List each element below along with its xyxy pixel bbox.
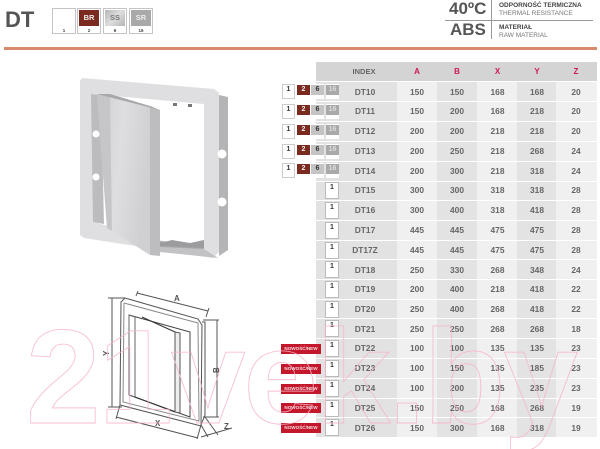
new product badges: NOWOŚĆ/NEW [284,346,318,351]
swatch: white [52,8,76,34]
row DT14: 218 [490,166,504,176]
new product badges: NOWOŚĆ/NEW [284,386,318,390]
thermal label [499,1,582,16]
colour options: single-colour rows: 1 [330,342,334,349]
options DT12: 2 [302,126,305,133]
row DT19 [355,284,581,294]
title: DT [5,7,34,32]
row DT24: 23 [571,383,581,393]
dimension Z: Z [224,422,229,431]
options DT13 [282,144,339,159]
row DT26: 168 [490,422,504,432]
row DT15: 318 [490,185,504,195]
colour options: single-colour rows: 1 [330,303,334,310]
swatch: SS: 6 [114,28,116,33]
row DT12: DT12 [355,126,375,136]
dimension B: B [212,367,221,373]
row DT17Z: DT17Z [352,244,378,254]
swatch: SR: 16 [138,28,144,33]
row DT18: 250 [410,264,424,274]
row DT23: 100 [410,363,424,373]
swatch: SR: SR [136,13,146,22]
row DT23: 135 [490,363,504,373]
row DT13 [355,146,581,156]
row DT16: 300 [410,205,424,215]
row DT11: 218 [530,106,544,116]
table columns background [316,62,597,437]
row DT17: 475 [490,224,504,234]
dimension A: A [174,294,180,303]
new product badges [281,344,321,433]
options DT12 [282,124,339,139]
row DT20: 22 [571,304,581,314]
row DT10: 20 [571,86,581,96]
row DT21: 268 [530,324,544,334]
row DT13: 200 [410,146,424,156]
row DT25: 168 [490,402,504,412]
row DT17: 28 [571,224,581,234]
row DT16: 28 [571,205,581,215]
row DT24: DT24 [355,383,375,393]
table header: Z [574,67,578,76]
options DT11: 6 [316,106,319,113]
row DT21: DT21 [355,324,375,334]
table header: INDEX [353,67,375,76]
options DT11 [282,104,339,119]
dimension X: X [155,419,161,428]
material label: MATERIAŁ [499,24,532,30]
material label: RAW MATERIAL [499,32,548,38]
row DT16: 418 [530,205,544,215]
options DT13: 16 [329,146,336,153]
row DT11: DT11 [355,106,375,116]
dimension Y [102,298,125,407]
row DT21: 268 [490,324,504,334]
options DT11: 16 [329,106,336,113]
new product badges: NOWOŚĆ/NEW [284,366,318,371]
table header: B [454,67,460,76]
dimension diagram [102,290,232,440]
row DT19: 22 [571,284,581,294]
row DT10: 150 [410,86,424,96]
row DT11: 20 [571,106,581,116]
row DT13: 268 [530,146,544,156]
dimension B [203,320,221,417]
row DT13: DT13 [355,146,375,156]
row DT15: DT15 [355,185,375,195]
row DT24: 200 [450,383,464,393]
colour options: single-colour rows: 1 [330,224,334,231]
row DT25: DT25 [355,402,375,412]
row DT20 [355,304,581,314]
row DT11: 200 [450,106,464,116]
row DT18: DT18 [355,264,375,274]
row DT25: 250 [450,402,464,412]
row DT14: DT14 [355,166,375,176]
colour options: single-colour rows: 1 [330,362,334,369]
colour options: single-colour rows: 1 [330,402,334,409]
row DT23: 150 [450,363,464,373]
row DT25: 268 [530,402,544,412]
row DT18: 330 [450,264,464,274]
row DT19: 418 [530,284,544,294]
material label [499,24,548,38]
swatch: brown: 2 [88,28,90,33]
row DT21: 250 [410,324,424,334]
row DT15: 28 [571,185,581,195]
row DT25: 19 [571,402,581,412]
options DT13: 1 [287,146,290,153]
specification block [445,0,593,39]
row DT12: 200 [410,126,424,136]
options DT11: 1 [287,106,290,113]
row DT10: 150 [450,86,464,96]
row DT15: 300 [450,185,464,195]
colour options: single-colour rows: 1 [330,382,334,389]
row DT24 [355,383,581,393]
row DT17Z: 475 [530,244,544,254]
options DT12: 16 [329,126,336,133]
row DT14: 300 [450,166,464,176]
swatch: brown: BR [84,13,94,22]
row DT22: DT22 [355,343,375,353]
row DT20: DT20 [355,304,375,314]
options DT11: 2 [302,106,305,113]
row DT12: 20 [571,126,581,136]
row DT15 [355,185,581,195]
table header [316,62,597,81]
row DT23: 185 [530,363,544,373]
options DT10: 6 [316,86,319,93]
row DT13: 250 [450,146,464,156]
row DT17Z: 475 [490,244,504,254]
options DT14: 2 [302,165,305,172]
row DT21: 250 [450,324,464,334]
row DT23 [355,363,581,373]
row DT17Z [352,244,581,254]
table header: X [495,67,500,76]
row DT23: 23 [571,363,581,373]
thermal label: THERMAL RESISTANCE [499,10,573,16]
row DT10: DT10 [355,86,375,96]
row DT12: 218 [490,126,504,136]
swatch: brown [77,8,101,34]
row DT12 [355,126,581,136]
options DT12: 6 [316,126,319,133]
options DT14: 6 [316,165,319,172]
row DT17Z: 28 [571,244,581,254]
row DT25: 150 [410,402,424,412]
row DT10: 168 [490,86,504,96]
row DT21: 18 [571,324,581,334]
row DT10 [355,86,581,96]
row DT25 [355,402,581,412]
row DT19: 218 [490,284,504,294]
thermal label: ODPORNOŚĆ TERMICZNA [499,2,582,8]
colour options: single-colour rows: 1 [330,322,334,329]
row DT12: 200 [450,126,464,136]
row DT11: 168 [490,106,504,116]
row DT18 [355,264,581,274]
row DT14 [355,166,581,176]
options DT14: 1 [287,165,290,172]
options DT10: 1 [287,86,290,93]
colour options: single-colour rows: 1 [330,421,334,428]
row DT19: 200 [410,284,424,294]
row DT12: 218 [530,126,544,136]
row DT10: 168 [530,86,544,96]
diagram frame [120,298,205,426]
row DT20: 250 [410,304,424,314]
row DT22: 100 [410,343,424,353]
swatch: SS [103,8,127,34]
row DT17: 475 [530,224,544,234]
row DT26: 150 [410,422,424,432]
row DT13: 218 [490,146,504,156]
row DT14: 24 [571,166,581,176]
row DT18: 348 [530,264,544,274]
row DT24: 135 [490,383,504,393]
dimension Y: Y [102,350,111,356]
row DT26: 300 [450,422,464,432]
row DT16 [355,205,581,215]
row DT17: 445 [410,224,424,234]
colour swatches [52,8,153,34]
options DT10: 2 [302,86,305,93]
watermark: 21vek.by [26,303,578,449]
row DT20: 268 [490,304,504,314]
colour options: single-colour rows: 1 [330,184,334,191]
colour options: multi-colour rows [282,84,339,178]
options DT10 [282,84,339,99]
row DT20: 418 [530,304,544,314]
dimension Z [201,417,232,437]
row DT18: 24 [571,264,581,274]
colour options: single-colour rows: 1 [330,283,334,290]
row DT19: 400 [450,284,464,294]
row DT15: 300 [410,185,424,195]
row DT17: 445 [450,224,464,234]
swatch: white: 1 [63,28,65,33]
row DT13: 24 [571,146,581,156]
row DT14: 318 [530,166,544,176]
row DT22 [355,343,581,353]
options DT13: 2 [302,146,305,153]
colour options: single-colour rows: 1 [330,263,334,270]
row DT18: 268 [490,264,504,274]
options DT14 [282,163,339,178]
row DT26: 318 [530,422,544,432]
swatch: SS: SS [110,13,120,22]
new product badges: NOWOŚĆ/NEW [284,405,318,410]
dimension A [136,291,209,317]
options DT13: 6 [316,146,319,153]
table header: Y [534,67,540,76]
row DT17: DT17 [355,224,375,234]
row DT26 [355,422,581,432]
row DT15: 318 [530,185,544,195]
dimension X [116,405,201,439]
row DT26: DT26 [355,422,375,432]
row DT11: 150 [410,106,424,116]
row DT24: 100 [410,383,424,393]
row DT22: 100 [450,343,464,353]
row DT11 [355,106,581,116]
row DT23: DT23 [355,363,375,373]
colour options: single-colour rows: 1 [330,244,334,251]
row DT21 [355,324,581,334]
row DT24: 235 [530,383,544,393]
table header: A [414,67,420,76]
material value: ABS [450,20,486,39]
colour options: single-colour rows [325,182,339,436]
swatch: SR [129,8,153,34]
row DT16: 400 [450,205,464,215]
row DT16: DT16 [355,205,375,215]
row DT26: 19 [571,422,581,432]
row DT16: 318 [490,205,504,215]
colour options: single-colour rows: 1 [330,204,334,211]
options DT10: 16 [329,86,336,93]
row DT17 [355,224,581,234]
new product badges: NOWOŚĆ/NEW [284,425,318,430]
row DT22: 135 [490,343,504,353]
options DT12: 1 [287,126,290,133]
row DT22: 135 [530,343,544,353]
options DT14: 16 [329,165,336,172]
row DT19: DT19 [355,284,375,294]
row DT14: 200 [410,166,424,176]
product photo: access door [80,78,228,258]
row DT22: 23 [571,343,581,353]
row DT17Z: 445 [410,244,424,254]
row DT20: 400 [450,304,464,314]
row DT17Z: 445 [450,244,464,254]
